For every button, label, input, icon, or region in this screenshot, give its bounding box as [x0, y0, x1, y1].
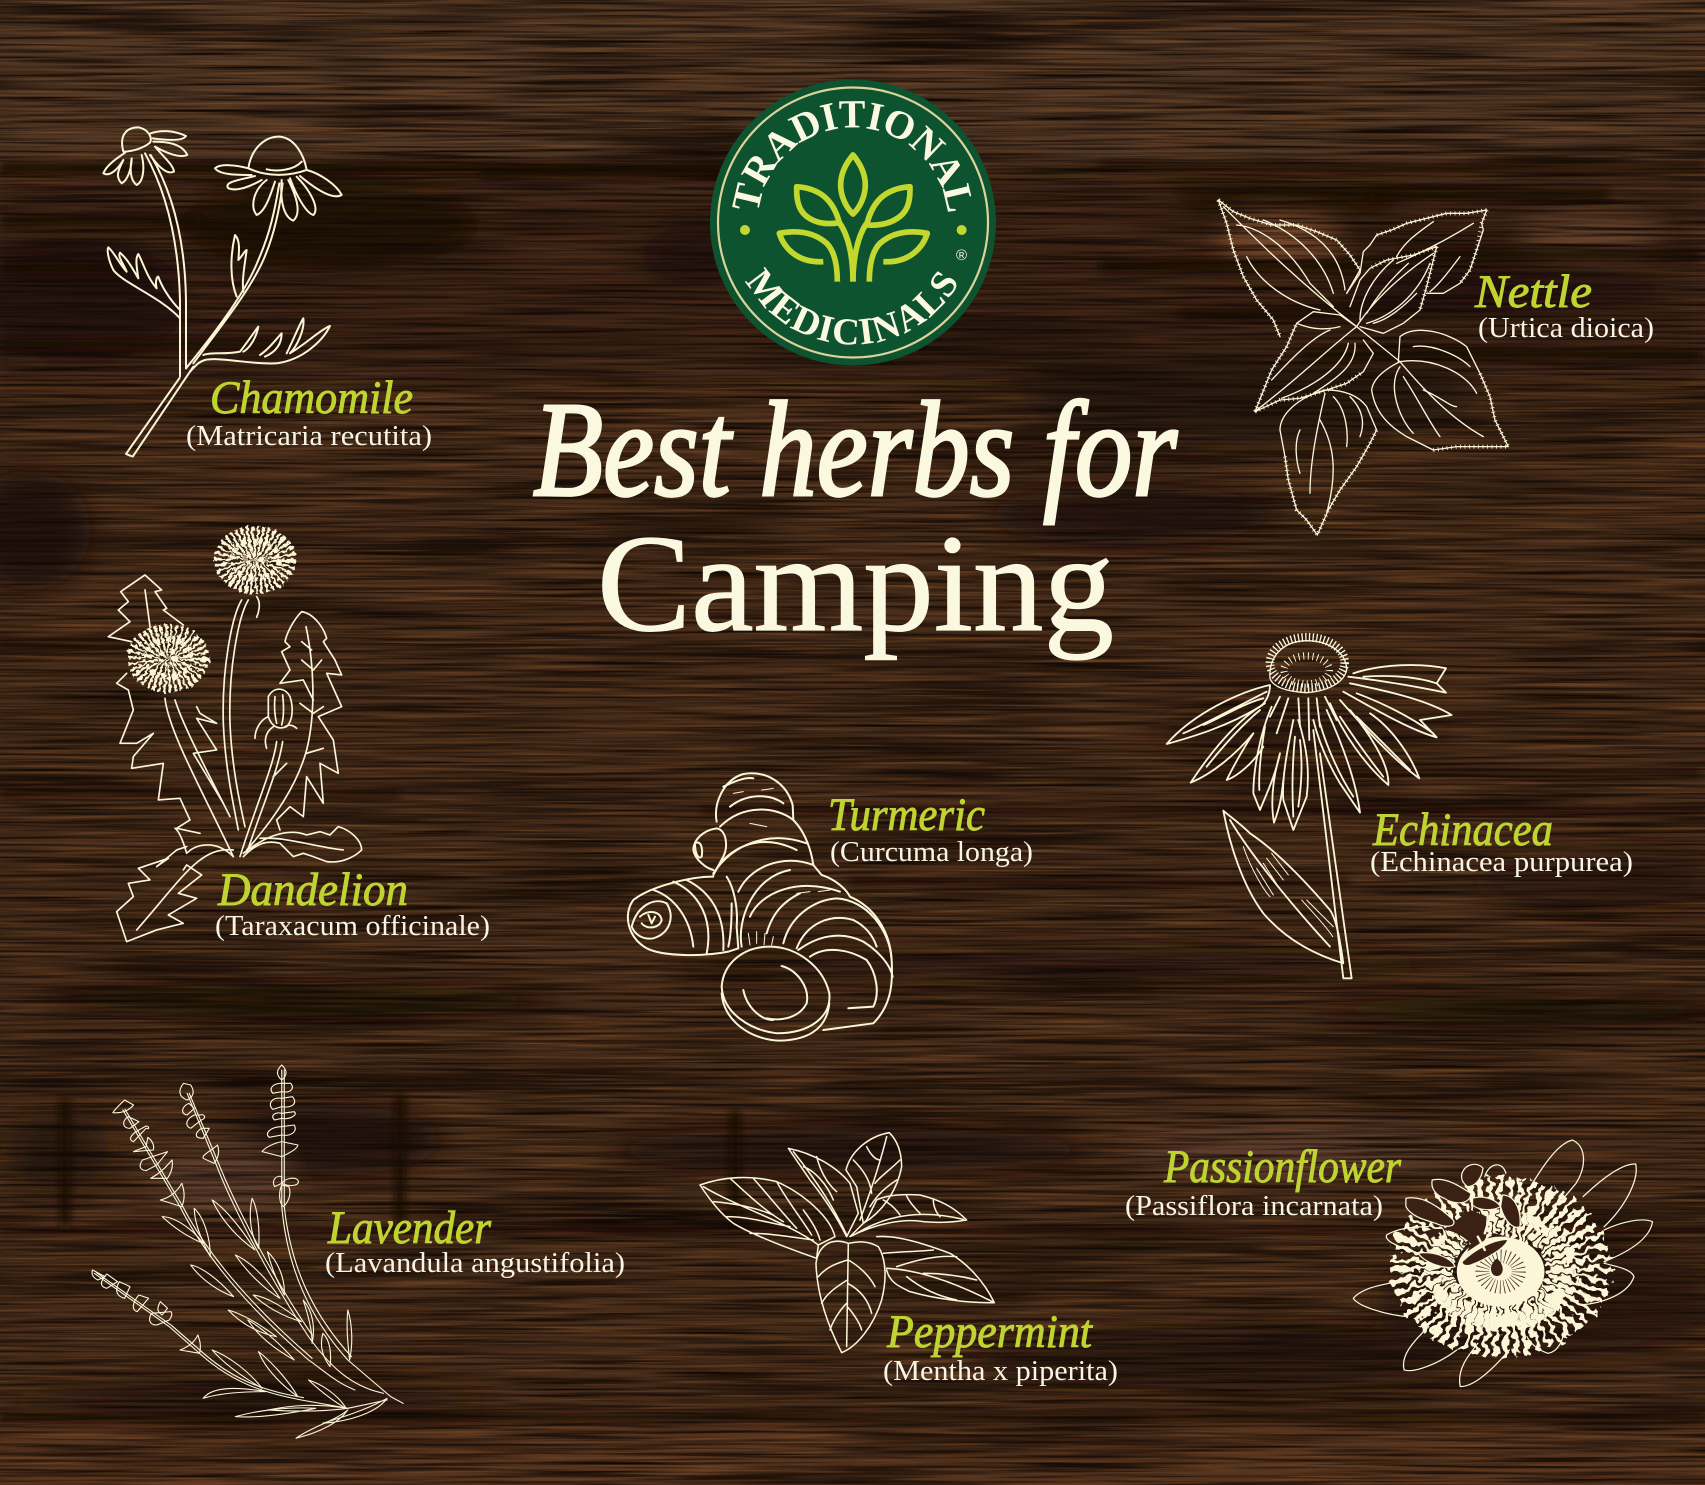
title: camping: Camping: [597, 507, 1114, 661]
latin name: turmeric: (Curcuma longa): [830, 836, 1033, 868]
panel: nettle: [1218, 200, 1654, 535]
panel: lavender: [92, 1065, 625, 1438]
name: passionflower: Passionflower: [1163, 1141, 1402, 1193]
logo text: bottom: MEDICINALS: [744, 266, 956, 345]
illustration: peppermint: [700, 1133, 994, 1353]
name: dandelion: Dandelion: [217, 864, 408, 916]
serrated leaf edges: [1218, 200, 1508, 535]
name: lavender: Lavender: [327, 1202, 492, 1254]
logo leaves icon: [740, 155, 967, 282]
latin name: nettle: (Urtica dioica): [1478, 312, 1654, 344]
panel: turmeric: [628, 773, 1033, 1041]
latin name: passionflower: (Passiflora incarnata): [1125, 1190, 1383, 1222]
panel: dandelion: [108, 535, 490, 942]
name: peppermint: Peppermint: [886, 1306, 1093, 1358]
name: nettle: Nettle: [1474, 266, 1592, 318]
registered mark: ®: [956, 247, 967, 264]
latin name: lavender: (Lavandula angustifolia): [325, 1247, 625, 1279]
illustration: echinacea: [1167, 637, 1452, 978]
illustration: turmeric: [628, 773, 893, 1041]
name: echinacea: Echinacea: [1372, 804, 1553, 856]
illustration: chamomile: [103, 127, 342, 457]
illustration: passionflower: [1353, 1140, 1653, 1387]
illustration: lavender: [92, 1065, 403, 1438]
panel: echinacea: [1167, 637, 1633, 978]
title: best herbs for: Best herbs for: [533, 375, 1178, 525]
latin name: dandelion: (Taraxacum officinale): [215, 910, 490, 942]
panel: peppermint: [700, 1133, 1118, 1387]
name: turmeric: Turmeric: [828, 789, 985, 841]
panel: chamomile: [103, 127, 432, 457]
name: chamomile: Chamomile: [210, 372, 413, 424]
panel: passionflower: [1125, 1140, 1653, 1387]
logo badge: [710, 80, 996, 366]
logo text: top: TRADITIONAL: [732, 101, 972, 212]
latin name: chamomile: (Matricaria recutita): [186, 420, 432, 452]
illustration: dandelion: [108, 535, 362, 942]
illustration: nettle: [1218, 200, 1508, 535]
latin name: peppermint: (Mentha x piperita): [883, 1355, 1118, 1387]
latin name: echinacea: (Echinacea purpurea): [1370, 846, 1633, 878]
